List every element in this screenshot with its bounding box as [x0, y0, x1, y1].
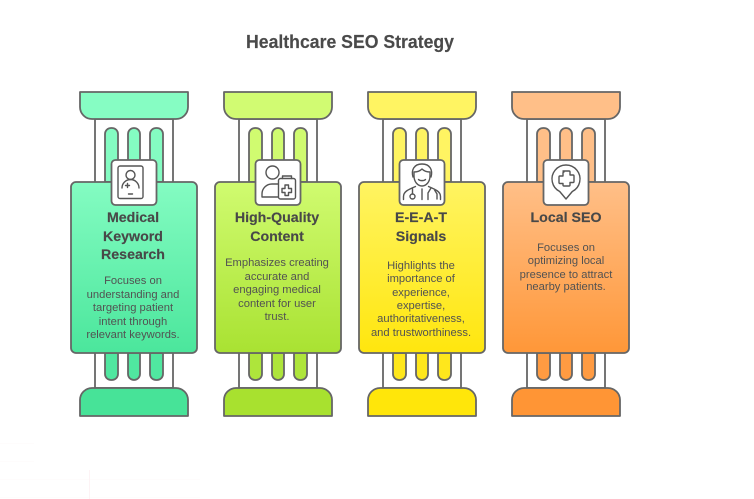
icon: location pin with medical cross — [544, 160, 588, 205]
pillar 1: Medical Keyword Research — [71, 92, 197, 416]
pillar 2: High-Quality Content — [215, 92, 341, 416]
icon: person with medical clipboard — [256, 160, 300, 205]
description: Focuses on — [104, 275, 162, 287]
description: trust. — [265, 311, 289, 323]
description: relevant keywords. — [86, 329, 180, 341]
description: optimizing local — [528, 255, 604, 267]
description: content for user — [238, 298, 316, 310]
icon: patient card — [112, 160, 156, 205]
heading: High-Quality — [235, 210, 319, 226]
description: expertise, — [397, 300, 445, 312]
description: presence to attract — [520, 269, 613, 281]
heading: Research — [101, 247, 165, 263]
description: experience, — [392, 287, 450, 299]
heading: Signals — [396, 229, 446, 245]
description: understanding and — [87, 289, 179, 301]
description: accurate and — [245, 271, 309, 283]
description: importance of — [387, 273, 456, 285]
description: targeting patient — [93, 302, 174, 314]
description: nearby patients. — [526, 281, 606, 293]
icon: doctor with stethoscope — [400, 160, 444, 205]
description: Highlights the — [387, 260, 455, 272]
heading: Keyword — [103, 229, 163, 245]
description: authoritativeness, — [377, 313, 465, 325]
title: Healthcare SEO Strategy — [246, 32, 454, 52]
description: engaging medical — [233, 284, 321, 296]
heading: E-E-A-T — [395, 210, 447, 226]
pillar 4: Local SEO — [503, 92, 629, 416]
pillar 3: E-E-A-T Signals — [359, 92, 485, 416]
heading: Content — [250, 229, 304, 245]
description: intent through — [99, 316, 167, 328]
heading: Medical — [107, 210, 159, 226]
description: and trustworthiness. — [371, 327, 471, 339]
description: Emphasizes creating — [225, 257, 329, 269]
description: Focuses on — [537, 242, 595, 254]
heading: Local SEO — [531, 210, 601, 226]
